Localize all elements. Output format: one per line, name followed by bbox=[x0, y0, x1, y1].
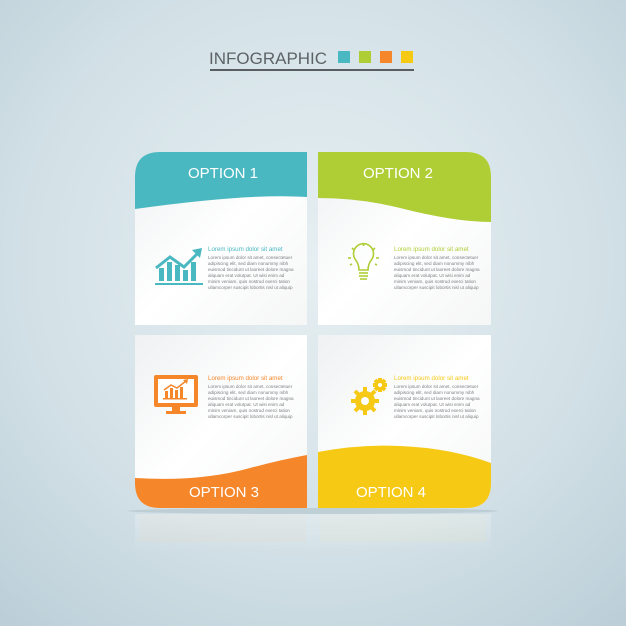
text block: option 2: aliquam erat volutpat. Ut wisi enim ad bbox=[394, 273, 471, 278]
text block: option 4: adipiscing elit, sed diam nonummy nibh bbox=[394, 390, 475, 395]
text block: option 1: Lorem ipsum dolor sit amet, consectetuer bbox=[208, 255, 293, 260]
text block: option 1: ullamcorper suscipit lobortis nisl ut aliquip bbox=[208, 285, 293, 290]
text block: option 4 bbox=[394, 375, 480, 419]
header band: option 1 bbox=[135, 152, 307, 209]
panel: option 1: OPTION 1 bbox=[188, 165, 258, 182]
panel: option 4: OPTION 4 bbox=[356, 484, 426, 501]
text block: option 3: adipiscing elit, sed diam nonummy nibh bbox=[208, 390, 289, 395]
text block: option 3 bbox=[208, 375, 294, 419]
shadow under panels bbox=[128, 508, 498, 514]
text block: option 2: adipiscing elit, sed diam nonummy nibh bbox=[394, 261, 475, 266]
text block: option 1: euismod tincidunt ut laoreet dolore magna bbox=[208, 267, 294, 272]
text block: option 3: Lorem ipsum dolor sit amet bbox=[208, 375, 283, 382]
text block: option 2: Lorem ipsum dolor sit amet bbox=[394, 246, 469, 253]
text block: option 1: Lorem ipsum dolor sit amet bbox=[208, 246, 283, 253]
icon: growth chart bbox=[155, 248, 203, 285]
text block: option 2: minim veniam, quis nostrud exerci tation bbox=[394, 279, 476, 284]
text block: option 3: ullamcorper suscipit lobortis nisl ut aliquip bbox=[208, 414, 293, 419]
text block: option 4: Lorem ipsum dolor sit amet, consectetuer bbox=[394, 384, 479, 389]
panel: option 4 bbox=[318, 335, 491, 508]
text block: option 1 bbox=[208, 246, 294, 290]
text block: option 4: ullamcorper suscipit lobortis nisl ut aliquip bbox=[394, 414, 479, 419]
text block: option 3: euismod tincidunt ut laoreet dolore magna bbox=[208, 396, 294, 401]
text block: option 4: euismod tincidunt ut laoreet dolore magna bbox=[394, 396, 480, 401]
text block: option 2: ullamcorper suscipit lobortis nisl ut aliquip bbox=[394, 285, 479, 290]
icon: gears bbox=[351, 378, 387, 415]
icon: light bulb bbox=[348, 243, 379, 279]
panel: option 3 bbox=[135, 335, 307, 508]
icon: monitor chart bbox=[154, 375, 198, 414]
text block: option 1: aliquam erat volutpat. Ut wisi enim ad bbox=[208, 273, 285, 278]
panel: option 2 bbox=[318, 152, 491, 325]
text block: option 4: minim veniam, quis nostrud exerci tation bbox=[394, 408, 476, 413]
footer band: option 3 bbox=[135, 455, 307, 508]
panel: option 3: OPTION 3 bbox=[189, 484, 259, 501]
title: INFOGRAPHIC bbox=[209, 49, 327, 68]
reflection bbox=[135, 514, 491, 554]
text block: option 2 bbox=[394, 246, 480, 290]
text block: option 4: Lorem ipsum dolor sit amet bbox=[394, 375, 469, 382]
panel: option 2: OPTION 2 bbox=[363, 165, 433, 182]
text block: option 4: aliquam erat volutpat. Ut wisi enim ad bbox=[394, 402, 471, 407]
text block: option 3: Lorem ipsum dolor sit amet, consectetuer bbox=[208, 384, 293, 389]
text block: option 3: aliquam erat volutpat. Ut wisi enim ad bbox=[208, 402, 285, 407]
footer band: option 4 bbox=[318, 446, 491, 508]
text block: option 1: adipiscing elit, sed diam nonummy nibh bbox=[208, 261, 289, 266]
text block: option 1: minim veniam, quis nostrud exerci tation bbox=[208, 279, 290, 284]
panel: option 1 bbox=[135, 152, 307, 325]
text block: option 2: Lorem ipsum dolor sit amet, consectetuer bbox=[394, 255, 479, 260]
text block: option 2: euismod tincidunt ut laoreet dolore magna bbox=[394, 267, 480, 272]
text block: option 3: minim veniam, quis nostrud exerci tation bbox=[208, 408, 290, 413]
header band: option 2 bbox=[318, 152, 491, 222]
title bbox=[209, 49, 414, 71]
